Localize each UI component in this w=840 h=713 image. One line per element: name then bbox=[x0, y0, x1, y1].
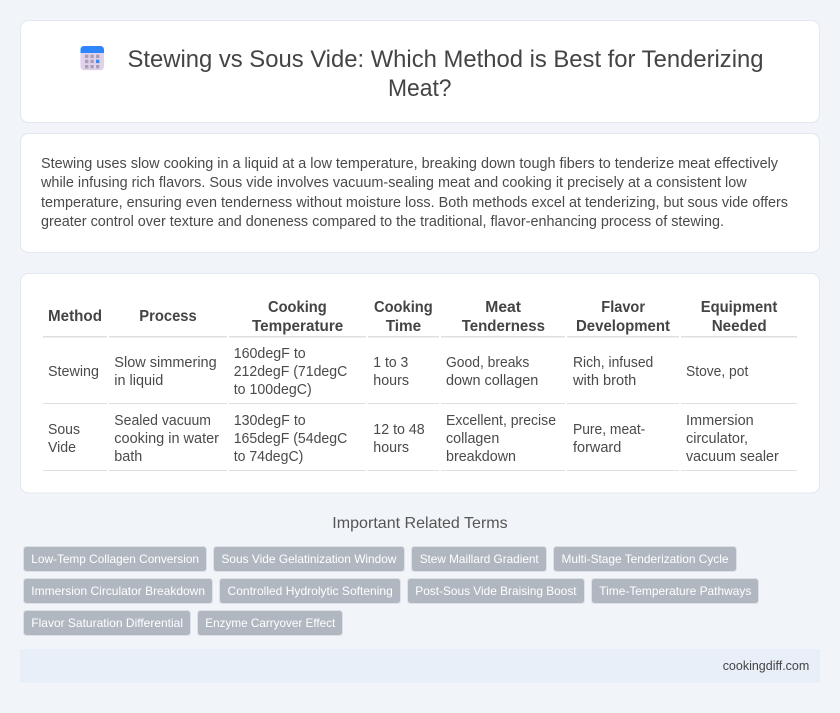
table row: sous vide: vacuum sealer bbox=[686, 449, 779, 465]
table row: stewing: 212degF (71degC bbox=[234, 364, 347, 380]
table row: stewing: hours bbox=[373, 373, 409, 389]
tag bbox=[198, 610, 342, 636]
table row: stewing: 1 to 3 bbox=[373, 355, 408, 371]
table row: sous vide: 165degF (54degC bbox=[234, 431, 347, 447]
tag: Sous Vide Gelatinization Window bbox=[222, 552, 397, 566]
tag list: related terms bbox=[24, 546, 758, 636]
tag bbox=[24, 610, 190, 636]
table row: sous vide: forward bbox=[573, 440, 621, 456]
text block: summary paragraph: temperature, ensuring even tenderness without moisture loss. Both methods excel at tenderizing, but sous vide offers bbox=[41, 195, 788, 211]
table row: stewing: Stove, pot bbox=[686, 364, 748, 380]
table row: sous vide: Sous bbox=[48, 422, 80, 438]
panel: title card bbox=[20, 20, 820, 122]
heading: title bbox=[128, 46, 764, 102]
heading: title: Meat? bbox=[388, 75, 452, 102]
table row: stewing: Rich, infused bbox=[573, 355, 653, 371]
table row: sous vide bbox=[48, 413, 779, 465]
panel: comparison table bbox=[20, 274, 820, 493]
tag: Flavor Saturation Differential bbox=[31, 616, 183, 630]
table row: sous vide: Sealed vacuum bbox=[114, 413, 211, 429]
tag: Enzyme Carryover Effect bbox=[205, 616, 336, 630]
table header row: Equipment bbox=[701, 299, 777, 316]
text block: summary paragraph: greater control over texture and doneness compared to the traditional, flavor-enhancing process of stewing. bbox=[41, 214, 724, 230]
table header row: Cooking bbox=[374, 299, 433, 316]
table row: sous vide: bath bbox=[114, 449, 142, 465]
tag bbox=[412, 546, 546, 572]
footer bbox=[20, 649, 820, 683]
table row: sous vide: to 74degC) bbox=[234, 449, 303, 465]
table header row: Cooking bbox=[268, 299, 327, 316]
table header row: Tenderness bbox=[462, 318, 545, 335]
table header row: Development bbox=[576, 318, 670, 335]
table row: stewing: 160degF to bbox=[234, 346, 306, 362]
table row: sous vide: Excellent, precise bbox=[446, 413, 556, 429]
table row: stewing: Stewing bbox=[48, 364, 99, 380]
table row: sous vide: Vide bbox=[48, 440, 76, 456]
tag bbox=[24, 578, 212, 604]
text block: summary paragraph: while infusing rich flavors. Sous vide involves vacuum-sealing meat and cooking it precisely at a consistent low bbox=[40, 175, 747, 191]
table row: sous vide: cooking in water bbox=[114, 431, 219, 447]
table row: sous vide: 12 to 48 bbox=[373, 422, 425, 438]
footer: cookingdiff.com bbox=[723, 658, 809, 673]
heading: important related terms: Important Related Terms bbox=[332, 515, 508, 532]
table row: stewing bbox=[48, 346, 748, 398]
table row: sous vide: circulator, bbox=[686, 431, 748, 447]
table row: sous vide: breakdown bbox=[446, 449, 516, 465]
text block: summary paragraph: Stewing uses slow cooking in a liquid at a low temperature, breaking down tough fibers to tenderize meat effectively bbox=[41, 156, 779, 172]
panel: summary text bbox=[20, 134, 820, 252]
tag: Post-Sous Vide Braising Boost bbox=[415, 584, 577, 598]
heading: title: Stewing vs Sous Vide: Which Method is Best for Tenderizing bbox=[128, 46, 764, 73]
table row: stewing: to 100degC) bbox=[234, 382, 312, 398]
table row: sous vide: 130degF to bbox=[234, 413, 306, 429]
tag bbox=[220, 578, 400, 604]
table row: sous vide: Pure, meat- bbox=[573, 422, 645, 438]
table row: stewing: with broth bbox=[572, 373, 636, 389]
table row: sous vide: hours bbox=[373, 440, 409, 456]
table header row: Meat bbox=[485, 299, 521, 316]
table row: stewing: Slow simmering bbox=[114, 355, 217, 371]
tag: Time-Temperature Pathways bbox=[599, 584, 751, 598]
table row: stewing: in liquid bbox=[114, 373, 163, 389]
table row: stewing: down collagen bbox=[446, 373, 538, 389]
tag bbox=[24, 546, 206, 572]
table header row: Time bbox=[386, 318, 422, 335]
tag: Immersion Circulator Breakdown bbox=[31, 584, 205, 598]
table row: sous vide: collagen bbox=[446, 431, 499, 447]
table header row: Process bbox=[139, 308, 197, 325]
table header row: Method bbox=[48, 308, 102, 325]
tag: Multi-Stage Tenderization Cycle bbox=[562, 552, 729, 566]
table row: stewing: Good, breaks bbox=[446, 355, 529, 371]
table row: sous vide: Immersion bbox=[686, 413, 754, 429]
tag bbox=[554, 546, 736, 572]
text block: summary paragraph bbox=[40, 156, 788, 230]
table header row: Temperature bbox=[252, 318, 344, 335]
tag: Stew Maillard Gradient bbox=[420, 552, 539, 566]
table header row: Flavor bbox=[601, 299, 645, 316]
icon: calendar bbox=[80, 46, 104, 70]
tag bbox=[214, 546, 404, 572]
table header row: Needed bbox=[712, 318, 767, 335]
table header row bbox=[48, 299, 777, 335]
tag: Low-Temp Collagen Conversion bbox=[31, 552, 199, 566]
tag bbox=[592, 578, 758, 604]
tag bbox=[408, 578, 584, 604]
tag: Controlled Hydrolytic Softening bbox=[228, 584, 393, 598]
